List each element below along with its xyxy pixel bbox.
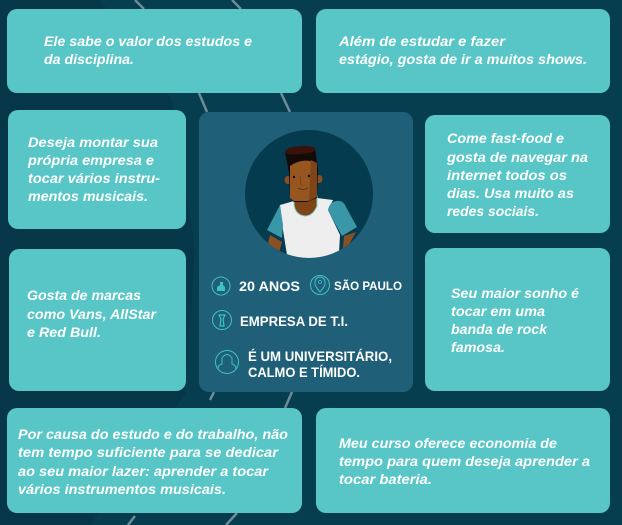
panel: course offer xyxy=(316,408,610,513)
panel: lack of time: tem tempo suficiente para se dedicar xyxy=(18,444,280,460)
personality row xyxy=(216,348,392,380)
panel: habits xyxy=(425,115,610,233)
location row: SÃO PAULO xyxy=(334,278,402,293)
panel: shows: estágio, gosta de ir a muitos shows. xyxy=(339,51,587,67)
panel: lack of time: Por causa do estudo e do trabalho, não xyxy=(18,426,288,442)
panel: dream: banda de rock xyxy=(451,321,548,337)
panel: persona profile xyxy=(199,112,413,392)
panel: course offer: tempo para quem deseja aprender a xyxy=(339,453,590,469)
panel: company goal: Deseja montar sua xyxy=(28,134,158,150)
neck xyxy=(294,196,317,216)
panel: company goal: própria empresa e xyxy=(27,152,154,168)
panel: shows: Além de estudar e fazer xyxy=(338,33,507,49)
arms xyxy=(268,232,356,253)
panel: brands: Gosta de marcas xyxy=(27,287,141,303)
panel: lack of time: vários instrumentos musicais. xyxy=(18,481,226,497)
personality row: É UM UNIVERSITÁRIO, xyxy=(248,348,392,364)
panel: brands: como Vans, AllStar xyxy=(27,306,158,322)
company row: EMPRESA DE T.I. xyxy=(240,313,348,329)
age row: 20 ANOS xyxy=(239,278,300,294)
panel: company goal xyxy=(8,110,186,229)
panel: brands: e Red Bull. xyxy=(27,324,101,340)
panel: habits: gosta de navegar na xyxy=(446,149,588,165)
panel: lack of time xyxy=(7,408,302,513)
panel: dream: Seu maior sonho é xyxy=(451,285,579,301)
panel: values: da disciplina. xyxy=(44,51,134,67)
panel: dream xyxy=(425,248,610,391)
panel: habits: internet todos os xyxy=(447,167,567,183)
panel: lack of time: ao seu maior lazer: aprender a tocar xyxy=(18,463,270,479)
panel: dream: tocar em uma xyxy=(451,303,545,319)
panel: values: Ele sabe o valor dos estudos e xyxy=(44,33,252,49)
panel: habits: dias. Usa muito as xyxy=(447,185,574,201)
panel: company goal: tocar vários instru- xyxy=(28,170,160,186)
age row xyxy=(212,277,300,295)
panel: brands xyxy=(9,249,186,391)
panel: habits: redes sociais. xyxy=(447,203,539,219)
panel: shows xyxy=(316,9,610,93)
panel: company goal: mentos musicais. xyxy=(28,188,148,204)
location row xyxy=(310,276,402,294)
avatar xyxy=(245,130,373,259)
t-shirt xyxy=(267,198,357,259)
panel: dream: famosa. xyxy=(451,339,505,355)
personality row: CALMO E TÍMIDO. xyxy=(248,364,360,380)
head xyxy=(284,146,322,202)
panel: values xyxy=(7,9,302,93)
company row xyxy=(212,310,348,330)
panel: course offer: tocar bateria. xyxy=(339,471,432,487)
panel: course offer: Meu curso oferece economia de xyxy=(339,435,557,451)
panel: habits: Come fast-food e xyxy=(447,130,564,146)
